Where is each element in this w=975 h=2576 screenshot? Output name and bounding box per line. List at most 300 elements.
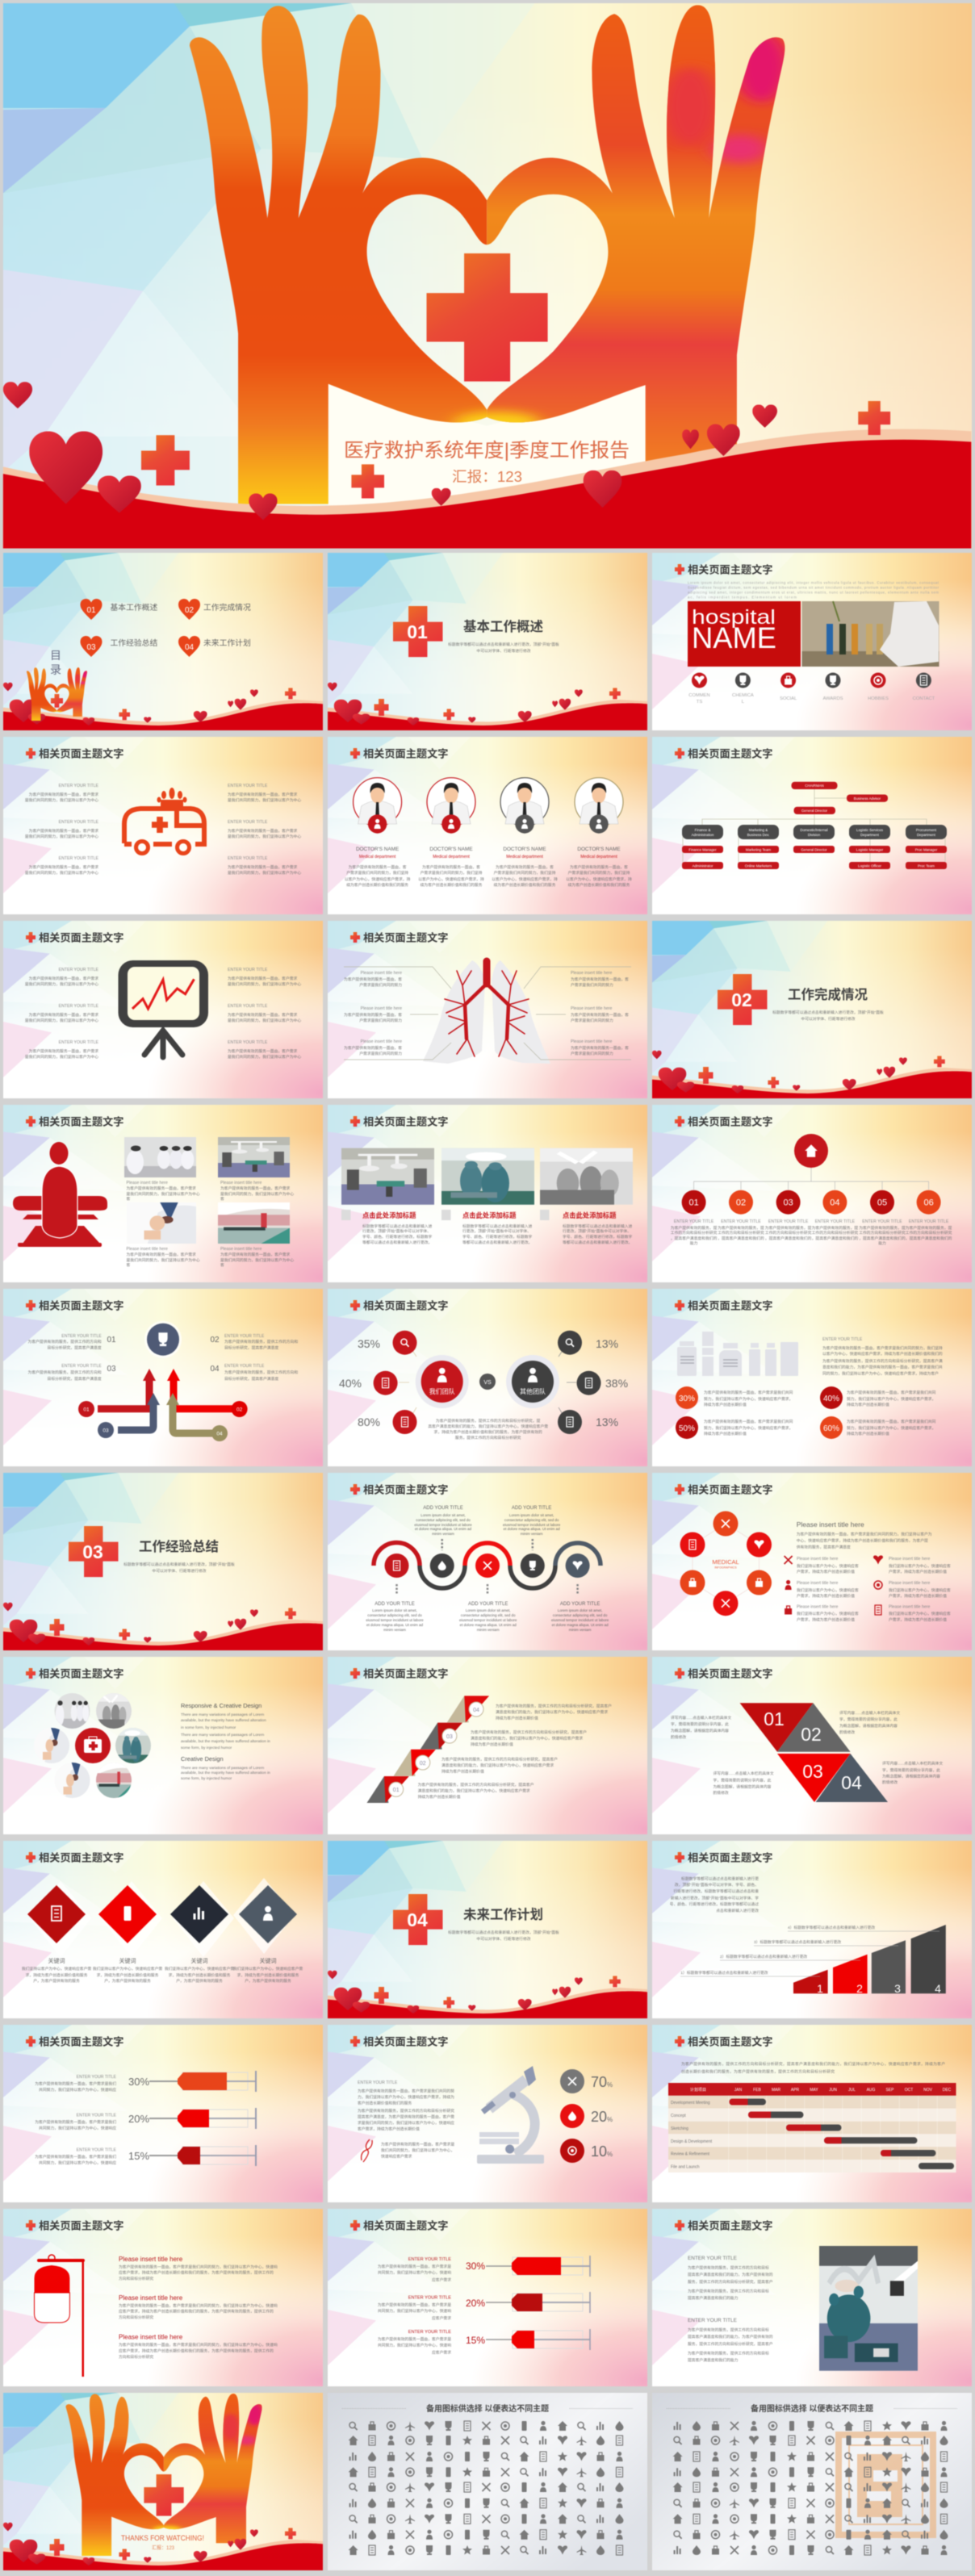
microscope text: 客户需求，持续为客户创造长期价值 bbox=[358, 2126, 420, 2132]
org chart nodes: Online Marketers bbox=[745, 864, 772, 868]
syringe captions: ENTER YOUR TITLE bbox=[408, 2295, 451, 2300]
gantt table: JUL bbox=[848, 2088, 856, 2093]
intro paragraph: ac, felis imperdiet tempus. Elementum ut lorem bbox=[688, 596, 797, 599]
doctor 4: 户需求是我们共同的努力，我们坚持 bbox=[568, 870, 630, 876]
right text column: 是我们共同的努力，我们坚持以客户为中心 bbox=[228, 1018, 301, 1023]
syringe captions: 为客户提供有效的服务一面由，客户需求是 bbox=[378, 2336, 451, 2342]
slide: thanks bbox=[3, 2392, 323, 2570]
medical bullet list: 我们坚持以客户为中心，快速响应客 bbox=[889, 1563, 951, 1569]
caption 3: 行更改，顶部"开始"面板中可以对字体、 bbox=[563, 1228, 631, 1234]
medical heading and text: 为客户提供有效的服务一面由，客户需求是我们共同的努力，我们坚持以客户为 bbox=[797, 1532, 932, 1537]
medical bullet list: 户需求，持续为客户创造长期价值 bbox=[889, 1593, 947, 1599]
medical bullet list: 我们坚持以客户为中心，快速响应客 bbox=[797, 1563, 859, 1569]
medical bullet list: Please insert title here bbox=[797, 1604, 838, 1609]
photo captions: Please insert title here bbox=[126, 1181, 168, 1186]
numbered captions: 01 bbox=[107, 1336, 116, 1344]
slide: medical infographic bbox=[652, 1473, 972, 1650]
percentage items: 持续为客户创造长期价值 bbox=[847, 1431, 889, 1436]
gantt table: 计划项目 bbox=[690, 2087, 706, 2093]
lower captions: eiusmod tempor incididunt ut labore bbox=[459, 1618, 517, 1622]
design text: available, but the majority have suffered alteration bbox=[181, 1718, 266, 1723]
caption 1: 行更改，顶部"开始"面板中可以对字体、 bbox=[362, 1228, 431, 1234]
microscope text: 我们共同的努力，我们坚持以客户为中心， bbox=[381, 2147, 454, 2153]
keyword captions: 求，持续为客户创造长期价值和服务 bbox=[97, 1972, 159, 1978]
node captions: ENTER YOUR TITLE bbox=[909, 1219, 949, 1224]
slide: table of contents bbox=[3, 553, 323, 730]
diamond 1 bbox=[27, 1881, 91, 1957]
syringe captions: 共同努力，我们坚持以客户为中心，快速响 bbox=[378, 2308, 451, 2314]
keyword captions: 关键词 bbox=[48, 1957, 65, 1964]
slide: six step hierarchy bbox=[652, 1105, 972, 1282]
gantt table: OCT bbox=[905, 2088, 913, 2093]
slide: person and four photos bbox=[3, 1105, 323, 1282]
gantt table: NOV bbox=[923, 2088, 933, 2093]
iv text: 为客户提供有效的服务一面由，客户需求是我们共同的努力，我们坚持以客户为中心，快速响 bbox=[119, 2264, 278, 2269]
medical bullet list bbox=[785, 1555, 951, 1622]
percentage items: 为客户提供有效的服务一面由，客户需求是我们共同 bbox=[704, 1390, 793, 1395]
triangle text: 为概念图解，请根据您的具体内容 bbox=[839, 1723, 898, 1729]
medical heading and text: Please insert title here bbox=[797, 1520, 864, 1528]
gantt table: Review & Refinement bbox=[671, 2152, 710, 2156]
contents items: 01 bbox=[86, 606, 96, 615]
caption 2: 等都可以通过点击和重新输入进行更改。 bbox=[462, 1240, 532, 1245]
doctor 3 bbox=[492, 778, 558, 888]
slide: gantt chart bbox=[652, 2025, 972, 2202]
icon row: AWARDS bbox=[822, 696, 843, 701]
stair text: 满意度和我们的能力，我们坚持以客户为中心，快速响应客户需求 bbox=[496, 1709, 608, 1715]
upper captions: ADD YOUR TITLE bbox=[512, 1506, 551, 1511]
gantt table: FEB bbox=[753, 2088, 762, 2093]
intro text: ENTER YOUR TITLE bbox=[822, 1337, 863, 1342]
org chart nodes: Logistic Manager bbox=[856, 847, 884, 852]
slide: pills bbox=[652, 1289, 972, 1466]
right callouts bbox=[571, 971, 629, 1056]
caption 3: 标题数字等都可以通过点击和重新输入进 bbox=[563, 1223, 633, 1229]
bar chart: 4 bbox=[935, 1982, 941, 1995]
icon set heading: 备用图标供选择 以便表达不同主题 bbox=[426, 2403, 549, 2414]
upper captions: minim veniam bbox=[432, 1532, 454, 1536]
gantt table bbox=[668, 2083, 956, 2172]
percentage items: 努力，我们坚持以客户为中心，快速响应客户需求， bbox=[847, 1425, 935, 1431]
intro text: 以客户为中心，快速响应客户需求，持续为客户创造长期价值和我们的 bbox=[822, 1351, 943, 1357]
microscope text: 力，我们坚持以客户为中心，快速响应客户需求，持续为 bbox=[358, 2094, 454, 2100]
photo captions: Please insert title here bbox=[126, 1247, 168, 1252]
bar labels: 3）标题数字等都可以通过点击和重新输入进行更改 bbox=[754, 1939, 841, 1945]
percentage items: 持续为客户创造长期价值 bbox=[847, 1402, 889, 1407]
right callouts: 户需求是我们共同的努力 bbox=[571, 1051, 613, 1056]
photo captions: 为客户提供有效的服务一面由，客户需求 bbox=[220, 1186, 291, 1191]
watermark stamp bbox=[839, 2435, 933, 2535]
percentage items: 为客户提供有效的服务一面由，客户需求是我们共同 bbox=[847, 1419, 936, 1424]
caption 3 bbox=[540, 1210, 633, 1245]
node captions: 工作的方向和目标分析研究 bbox=[718, 1230, 764, 1236]
gantt table: JUN bbox=[829, 2088, 837, 2093]
photo captions: 客 bbox=[220, 1196, 224, 1202]
slide: team comparison bbox=[328, 1289, 647, 1466]
stair steps: 02 bbox=[420, 1761, 426, 1767]
upper captions: et dolore magna aliqua. Ut enim ad bbox=[415, 1527, 472, 1531]
percentage items: 为客户提供有效的服务一面由，客户需求是我们共同 bbox=[704, 1419, 793, 1424]
icon: iv drip bbox=[34, 2255, 85, 2377]
bar labels: 1）标题数字等都可以通过点击和重新输入进行更改 bbox=[680, 1970, 768, 1976]
section title: 工作完成情况 bbox=[788, 986, 868, 1002]
design text: available, but the majority have suffered alteration in bbox=[181, 1739, 270, 1744]
doctor 1: 为客户提供有效的服务一面由，客 bbox=[349, 864, 407, 870]
section cross bbox=[393, 606, 442, 657]
syringe captions: 共同努力，我们坚持以客户为中心，快速响应 bbox=[39, 2087, 116, 2093]
slide: presentation board bbox=[3, 921, 323, 1098]
slide: section 03 bbox=[3, 1473, 323, 1650]
node captions: ENTER YOUR TITLE bbox=[815, 1219, 856, 1224]
slide: rising bars: 相关页面主题文字 bbox=[688, 1851, 773, 1864]
right callouts: Please insert title here bbox=[571, 1006, 612, 1011]
slide: doctors: 相关页面主题文字 bbox=[363, 747, 449, 760]
gantt table: File and Launch bbox=[671, 2164, 700, 2169]
slide: syringes bbox=[3, 2025, 323, 2202]
photo captions: 为客户提供有效的服务一面由，客户需求 bbox=[220, 1252, 291, 1257]
section note bbox=[772, 1010, 884, 1022]
left text column: 为客户提供有效的服务一面由，客户需求 bbox=[29, 828, 98, 834]
microscope percentages bbox=[560, 2069, 613, 2163]
right text column: ENTER YOUR TITLE bbox=[228, 1040, 268, 1045]
stair text: 持续为客户创造长期价值 bbox=[441, 1769, 484, 1774]
triangle text: 酌情修改 bbox=[671, 1734, 686, 1740]
gantt table: JAN bbox=[734, 2088, 743, 2093]
microscope text: 为客户提供有效的服务一面由，客户需求是我们共同的努 bbox=[358, 2089, 454, 2093]
intro paragraph: adipiscing sed amet, integer condimentum eros ut erat, ultricies mattis, nunc ut laoreet pellentesque, elementum ante nulla sem bbox=[688, 591, 939, 594]
slide: microscope bbox=[328, 2025, 647, 2202]
medical ring bbox=[680, 1511, 772, 1616]
percentage items: 60% bbox=[823, 1424, 839, 1433]
upper captions: Lorem ipsum dolor sit amet, bbox=[421, 1513, 466, 1517]
right callouts: 为客户提供有效的服务一面由，客 bbox=[571, 1012, 629, 1018]
node captions: ENTER YOUR TITLE bbox=[862, 1219, 902, 1224]
diamond 3 bbox=[170, 1881, 234, 1957]
slide: wave timeline bbox=[328, 1473, 647, 1650]
icon: seated person bbox=[13, 1142, 107, 1247]
left text column: 为客户提供有效的服务一面由，客户需求 bbox=[29, 864, 98, 870]
photo: surgeons bbox=[441, 1148, 534, 1205]
doctor 1: 以客户为中心，快速响应客户需求，持 bbox=[345, 876, 411, 882]
gantt intro: 为客户提供有效的服务，提供工作的方向和目标分析研究，提高客户满意度和我们的能力，我们坚持以客户为中心，快速响应客户需求，持续为客户 bbox=[681, 2061, 945, 2067]
right text column: 是我们共同的努力，我们坚持以客户为中心 bbox=[228, 1054, 301, 1060]
lower captions: ADD YOUR TITLE bbox=[468, 1602, 508, 1607]
text block: 为客户提供有效的服务，提供工作的方向和目标 bbox=[688, 2264, 769, 2271]
syringe captions: 应客户需求 bbox=[432, 2315, 451, 2321]
caption 2: 点击此处添加标题 bbox=[462, 1211, 517, 1219]
diamond 2 bbox=[98, 1881, 162, 1957]
slide: pills: 相关页面主题文字 bbox=[688, 1299, 773, 1312]
icon set heading: 备用图标供选择 以便表达不同主题 bbox=[751, 2403, 873, 2414]
left callouts bbox=[344, 971, 402, 1056]
left text column: 为客户提供有效的服务一面由，客户需求 bbox=[29, 1012, 98, 1018]
node captions: ENTER YOUR TITLE bbox=[721, 1219, 761, 1224]
lower captions: et dolore magna aliqua. Ut enim ad bbox=[460, 1623, 517, 1627]
contents items: 未来工作计划 bbox=[203, 638, 251, 648]
comparison note bbox=[428, 1418, 548, 1441]
bar labels: 4）标题数字等都可以通过点击和重新输入进行更改 bbox=[788, 1925, 875, 1930]
node captions: 为客户提供有效的服务，提 bbox=[718, 1225, 764, 1231]
syringe 15 percent bbox=[466, 2329, 590, 2350]
keyword captions: 户，为客户提供有效的服务 bbox=[176, 1978, 223, 1984]
keyword captions: 求，持续为客户创造长期价值和服务 bbox=[26, 1972, 88, 1978]
section note: 中可以对字体、行距等进行修改 bbox=[476, 648, 531, 654]
lower captions: Lorem ipsum dolor sit amet, bbox=[372, 1608, 417, 1612]
intro paragraph: Suspendisse feugiat dictum, sem egestas, sed bibendum urna sit amet tincidunt commodo, pretium auctor ligula. Aliquam porttitor bbox=[688, 586, 939, 589]
triangle text: 为概念图解，请根据您的具体内容 bbox=[713, 1784, 772, 1790]
section note: 标题数字等都可以通过点击和重新输入进行更改，顶部"开始"面板 bbox=[448, 1930, 559, 1935]
doctor 3: DOCTOR'S NAME bbox=[503, 847, 546, 852]
right text column: 为客户提供有效的服务一面由，客户需求 bbox=[228, 976, 298, 981]
org chart nodes: Department bbox=[917, 833, 936, 837]
syringe captions: ENTER YOUR TITLE bbox=[408, 2330, 451, 2335]
numbered captions bbox=[28, 1334, 298, 1382]
triangle text: 字，需得简要的说明分享内容，此 bbox=[839, 1717, 898, 1722]
gantt intro bbox=[681, 2061, 945, 2074]
org chart nodes: Finance & bbox=[695, 828, 710, 832]
icon row: TS bbox=[697, 700, 702, 705]
text block: 服务，提供工作的方向和目标分析研究，提高客户 bbox=[688, 2341, 773, 2347]
slide: three photos bbox=[328, 1105, 647, 1282]
triangle text: 评写内容......点击输入本栏的具体文 bbox=[671, 1715, 731, 1721]
other team node bbox=[506, 1355, 559, 1408]
left callouts: 户需求是我们共同的努力 bbox=[359, 1018, 402, 1023]
versus badge: VS bbox=[483, 1380, 492, 1386]
hierarchy connectors bbox=[694, 1168, 929, 1190]
photo captions: Please insert title here bbox=[220, 1181, 262, 1186]
org chart nodes: Proc Manager bbox=[915, 847, 938, 852]
lower captions: eiusmod tempor incididunt ut labore bbox=[366, 1618, 424, 1622]
left text column: 是我们共同的努力，我们坚持以客户为中心 bbox=[25, 1054, 98, 1060]
percentage items: 努力，我们坚持以客户为中心，快速响应客户需求， bbox=[704, 1425, 793, 1431]
intro text: 意度和我们的能力，为客户提供有效的服务一面由，客户需求是我们共 bbox=[822, 1364, 943, 1370]
left callouts: Please insert title here bbox=[361, 971, 402, 976]
photo captions: 是我们共同的努力，我们坚持以客户为中心 bbox=[126, 1191, 200, 1197]
caption 1 bbox=[341, 1210, 433, 1245]
org chart nodes: Division bbox=[808, 833, 821, 837]
doctor 4: Medical department bbox=[580, 855, 617, 859]
intro text: 号、颜色、行距等进行修改。标题数字等都可以通过 bbox=[670, 1901, 759, 1907]
versus badge bbox=[479, 1374, 496, 1390]
stair text: 持续为客户创造长期价值 bbox=[471, 1742, 513, 1747]
slide: org chart bbox=[652, 737, 972, 914]
iv text: 方向和目标分析研究 bbox=[119, 2276, 153, 2281]
keyword captions: 户，为客户提供有效的服务 bbox=[104, 1978, 151, 1984]
slide: person and four photos: 相关页面主题文字 bbox=[39, 1115, 124, 1128]
other team node: 其他团队 bbox=[520, 1387, 546, 1395]
left metric nodes: 40% bbox=[339, 1377, 362, 1390]
contents items: 02 bbox=[185, 606, 194, 615]
gantt intro: 创造长期价值和我们的服务，为客户提供有效的服务，提供工作的方向和目标分析研究 bbox=[681, 2069, 835, 2074]
doctor 4: 为客户提供有效的服务一面由，客 bbox=[570, 864, 628, 870]
lung callout lines bbox=[344, 967, 631, 1060]
iv text: 为客户提供有效的服务一面由，客户需求是我们共同的努力，我们坚持以客户为中心，快速响 bbox=[119, 2303, 278, 2308]
microscope text: ENTER YOUR TITLE bbox=[358, 2080, 398, 2085]
section cross: 02 bbox=[731, 989, 752, 1010]
keyword captions: 关键词 bbox=[260, 1957, 276, 1964]
medical bullet list: Please insert title here bbox=[889, 1604, 930, 1609]
triangle text bbox=[671, 1710, 943, 1796]
org chart nodes: CHAIRMAN bbox=[805, 784, 824, 788]
icon row: L bbox=[742, 700, 745, 705]
icon: chart board bbox=[118, 960, 208, 1057]
upper captions: Lorem ipsum dolor sit amet, bbox=[509, 1513, 554, 1517]
photo: surgeons monochrome bbox=[540, 1148, 633, 1205]
syringe captions: 共同努力，我们坚持以客户为中心，快速响 bbox=[378, 2269, 451, 2276]
syringe captions: 共同努力，我们坚持以客户为中心，快速响 bbox=[378, 2342, 451, 2348]
microscope text: 为客户提供有效的服务一面由，客户需求是 bbox=[381, 2142, 454, 2147]
slide: iv bag: 相关页面主题文字 bbox=[39, 2219, 124, 2232]
right callouts: Please insert title here bbox=[571, 971, 612, 976]
doctor 3: 户需求是我们共同的努力，我们坚持 bbox=[494, 870, 556, 876]
syringe captions: 为客户提供有效的服务一面由，客户需求是我们 bbox=[35, 2154, 116, 2160]
numbered captions: 目标分析研究，提高客户满意度 bbox=[224, 1376, 278, 1382]
gantt table: Sketching bbox=[671, 2126, 688, 2131]
slide: gantt chart: 相关页面主题文字 bbox=[688, 2035, 773, 2048]
bar labels bbox=[680, 1925, 939, 1976]
photo captions: 客 bbox=[126, 1262, 131, 1268]
doctor 1: Medical department bbox=[359, 855, 396, 859]
triangle text: 字，需得简要的说明分享内容，此 bbox=[882, 1767, 940, 1773]
org chart nodes: Administration bbox=[692, 833, 714, 837]
stair text: 为客户提供有效的服务，提供工作的方向和目标分析研究，提高客户 bbox=[418, 1782, 534, 1788]
node captions: ，提高客户满意度和我们的 bbox=[765, 1236, 812, 1241]
left text column: 是我们共同的努力，我们坚持以客户为中心 bbox=[25, 981, 98, 987]
left text column: 为客户提供有效的服务一面由，客户需求 bbox=[29, 792, 98, 797]
syringe captions bbox=[378, 2257, 451, 2355]
doctor 2: DOCTOR'S NAME bbox=[429, 847, 473, 852]
arrow diagram bbox=[78, 1369, 248, 1441]
iv text: 应客户需求，持续为客户创造长期价值和我们的服务，为客户提供有效的服务，提供工作的 bbox=[119, 2269, 274, 2276]
doctor 4: 续为客户创造长期价值和我们的服务 bbox=[568, 882, 630, 888]
triangle text: 酌情修改 bbox=[839, 1729, 855, 1735]
lower captions: Lorem ipsum dolor sit amet, bbox=[558, 1608, 602, 1612]
syringe captions: 为客户提供有效的服务一面由，客户需求是 bbox=[378, 2302, 451, 2308]
lower captions bbox=[366, 1602, 609, 1632]
text block: 为客户提供有效的服务，提供工作的方向和目标 bbox=[688, 2289, 769, 2294]
left callouts: Please insert title here bbox=[361, 1006, 402, 1011]
triangle text: 为概念图解，请根据您的具体内容 bbox=[671, 1728, 729, 1733]
numbered captions: 为客户提供有效的服务，提供工作的方向和 bbox=[224, 1339, 298, 1344]
photo captions: 是我们共同的努力，我们坚持以客户为中心 bbox=[126, 1257, 200, 1263]
section title: 未来工作计划 bbox=[463, 1907, 543, 1922]
wave line bbox=[374, 1539, 600, 1595]
doctor 4 bbox=[566, 778, 632, 888]
doctor 4: DOCTOR'S NAME bbox=[577, 847, 621, 852]
left text column: ENTER YOUR TITLE bbox=[59, 1040, 99, 1045]
numbered captions: ENTER YOUR TITLE bbox=[61, 1364, 102, 1369]
section note bbox=[448, 642, 559, 654]
intro text: 点击和重新输入进行更改 bbox=[716, 1908, 759, 1913]
org chart nodes: Administrator bbox=[693, 864, 713, 868]
left metric nodes bbox=[339, 1331, 416, 1434]
microscope text: 求是我们共同的努力，我们坚持以客户为中心，快速响应 bbox=[358, 2120, 454, 2126]
section note: 标题数字等都可以通过点击和重新输入进行更改，顶部"开始"面板 bbox=[772, 1010, 884, 1015]
text block bbox=[688, 2256, 773, 2363]
triangle mosaic: 04 bbox=[841, 1772, 862, 1793]
slide: syringes with red labels bbox=[328, 2209, 647, 2386]
right callouts: Please insert title here bbox=[571, 1039, 612, 1044]
photo captions: 是我们共同的努力，我们坚持以客户为中心 bbox=[220, 1191, 294, 1197]
caption 3: 等都可以通过点击和重新输入进行更改。 bbox=[563, 1240, 632, 1245]
photo captions: 是我们共同的努力，我们坚持以客户为中心 bbox=[220, 1257, 294, 1263]
lower captions: Lorem ipsum dolor sit amet, bbox=[466, 1608, 510, 1612]
icon row: HOBBIES bbox=[868, 696, 889, 701]
left text column: ENTER YOUR TITLE bbox=[59, 856, 99, 861]
gantt table: DEC bbox=[943, 2088, 952, 2093]
percentage items bbox=[676, 1386, 936, 1439]
medical ring: MEDICAL bbox=[712, 1558, 739, 1566]
percentage items: 持续为客户创造长期价值 bbox=[704, 1402, 747, 1407]
intro text: 为客户提供有效的服务，提供工作的方向和目标分析研究，提高客户满 bbox=[822, 1358, 943, 1364]
section note bbox=[123, 1562, 235, 1574]
stair steps bbox=[366, 1696, 489, 1803]
slide: team comparison: 相关页面主题文字 bbox=[363, 1299, 449, 1312]
bar chart: 3 bbox=[894, 1982, 901, 1995]
right text column: ENTER YOUR TITLE bbox=[228, 968, 268, 972]
design text bbox=[181, 1702, 270, 1781]
design text: some form, by injected humor bbox=[181, 1776, 232, 1781]
microscope percentages: 70% bbox=[591, 2074, 613, 2090]
org chart nodes: Proc Team bbox=[918, 864, 935, 868]
slide: hospital name bbox=[652, 553, 972, 730]
doctor 1: 户需求是我们共同的努力，我们坚持 bbox=[346, 870, 408, 876]
left metric nodes: 80% bbox=[358, 1416, 380, 1428]
stair text: 满意度和我们的能力，我们坚持以客户为中心，快速响应客户需求 bbox=[441, 1763, 554, 1768]
lower captions: consectetur adipiscing elit, sed do bbox=[367, 1613, 422, 1617]
intro text: 标题数字等都可以通过点击和重新输入进行更 bbox=[681, 1876, 759, 1882]
right callouts: 为客户提供有效的服务一面由，客 bbox=[571, 1045, 629, 1051]
org chart nodes: Logistic Officer bbox=[858, 864, 882, 868]
numbered captions: 为客户提供有效的服务，提供工作的方向和 bbox=[28, 1370, 102, 1375]
bar labels: 2）标题数字等都可以通过点击和重新输入进行更改 bbox=[720, 1954, 807, 1959]
microscope percentages: 10% bbox=[591, 2143, 613, 2160]
gantt table: MAY bbox=[810, 2088, 818, 2093]
slide: operating room photo bbox=[652, 2209, 972, 2386]
medical bullet list: Please insert title here bbox=[889, 1557, 930, 1562]
right callouts: 户需求是我们共同的努力 bbox=[571, 1018, 613, 1023]
syringe captions: 共同努力，我们坚持以客户为中心，快速响应 bbox=[39, 2126, 116, 2131]
iv text: 应客户需求，持续为客户创造长期价值和我们的服务，为客户提供有效的服务，提供工作的 bbox=[119, 2348, 274, 2353]
slide: circular photos: 相关页面主题文字 bbox=[39, 1667, 124, 1680]
stair text: 满意度和我们的能力，我们坚持以客户为中心，快速响应客户需求 bbox=[471, 1735, 583, 1742]
node captions bbox=[671, 1219, 952, 1246]
contents items: 04 bbox=[185, 643, 194, 652]
right callouts: 户需求是我们共同的努力 bbox=[571, 982, 613, 988]
section cross bbox=[718, 974, 767, 1025]
triangle text: 评写内容......点击输入本栏的具体文 bbox=[839, 1710, 900, 1716]
numbered captions: ENTER YOUR TITLE bbox=[224, 1334, 265, 1339]
syringe captions: ENTER YOUR TITLE bbox=[77, 2148, 117, 2153]
slide: stairs: 相关页面主题文字 bbox=[363, 1667, 449, 1680]
medical bullet list: 我们坚持以客户为中心，快速响应客 bbox=[889, 1587, 951, 1593]
medical bullet list: 我们坚持以客户为中心，快速响应客 bbox=[889, 1611, 951, 1616]
org chart nodes bbox=[682, 782, 947, 869]
bar chart: 2 bbox=[856, 1982, 863, 1995]
medical bullet list: Please insert title here bbox=[797, 1581, 838, 1586]
slide: three photos: 相关页面主题文字 bbox=[363, 1115, 449, 1128]
org chart nodes: Business Advisor bbox=[854, 797, 881, 801]
text block: ENTER YOUR TITLE bbox=[688, 2318, 737, 2323]
caption 2 bbox=[441, 1210, 533, 1245]
node captions: 能力 bbox=[690, 1240, 698, 1246]
doctor 3: 续为客户创造长期价值和我们的服务 bbox=[494, 882, 556, 888]
design text: There are many variations of passages of Lorem bbox=[181, 1733, 264, 1738]
gantt table: Concept bbox=[671, 2114, 686, 2118]
comparison note: 为客户提供有效的服务，提供工作的方向和目标分析研究，提 bbox=[436, 1418, 541, 1424]
contents items: 03 bbox=[86, 643, 96, 652]
photo captions: 为客户提供有效的服务一面由，客户需求 bbox=[126, 1186, 196, 1191]
